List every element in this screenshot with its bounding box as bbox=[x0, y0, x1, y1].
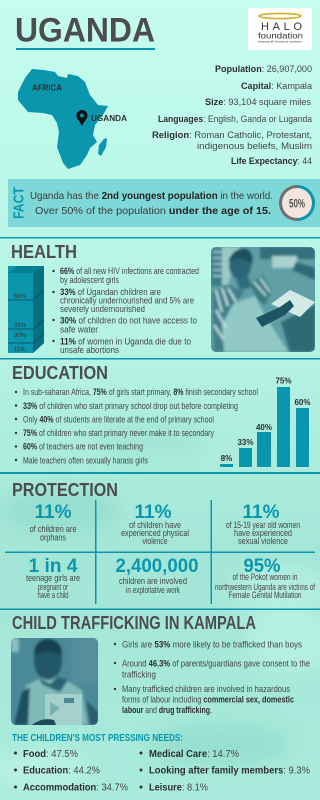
icon: map pin bbox=[76, 110, 88, 126]
chart: 50% donut: 50% bbox=[289, 196, 305, 210]
heading: fact: FACT bbox=[10, 187, 28, 219]
stat: exploitative work: in exploitative work bbox=[126, 585, 180, 595]
health bullets: 33% of Ugandan children are bbox=[60, 287, 161, 297]
trafficking bullets bbox=[114, 640, 310, 715]
stat: sexual violence: 11% bbox=[242, 502, 280, 523]
needs list: Leisure: 8.1% bbox=[149, 782, 208, 794]
logo: Halo Foundation: helping all Kenema orphans bbox=[258, 40, 303, 44]
country facts: Languages: English, Ganda or Luganda bbox=[158, 114, 313, 125]
logo: Halo Foundation: foundation bbox=[258, 30, 303, 40]
stat: teenage pregnancy: teenage girls are bbox=[26, 573, 80, 583]
health bullets: unsafe abortions bbox=[60, 345, 119, 355]
trafficking bullets: Girls are 53% more likely to be trafficked than boys bbox=[122, 640, 302, 650]
label: Africa: AFRICA bbox=[32, 82, 62, 92]
education bullets: Male teachers often sexually harass girls bbox=[23, 456, 148, 466]
chart: 3D stacked bar: 11% bbox=[14, 347, 26, 353]
panel: fact bbox=[8, 179, 320, 227]
fact text: Uganda has the 2nd youngest population in the world. bbox=[30, 190, 273, 202]
stat: orphans: orphans bbox=[40, 532, 66, 542]
stat: exploitative work: 2,400,000 bbox=[116, 556, 198, 577]
heading: child trafficking: CHILD TRAFFICKING IN KAMPALA bbox=[12, 613, 256, 633]
education bullets: Only 40% of students are literate at the end of primary school bbox=[23, 414, 214, 424]
country facts: Size: 93,104 square miles bbox=[205, 97, 311, 108]
needs list: Education: 44.2% bbox=[23, 766, 100, 776]
needs list: Looking after family members: 9.3% bbox=[149, 766, 310, 776]
trafficking bullets: Many trafficked children are involved in hazardous bbox=[122, 684, 290, 694]
stat: exploitative work bbox=[116, 556, 198, 595]
fact text: Over 50% of the population under the age of 15. bbox=[35, 205, 271, 217]
country facts: Life Expectancy: 44 bbox=[231, 156, 312, 167]
stat: teenage pregnancy: pregnant or bbox=[38, 582, 68, 592]
health bullets: by adolescent girls bbox=[60, 275, 119, 285]
stat: sexual violence bbox=[226, 502, 300, 546]
panel: child trafficking bbox=[11, 613, 310, 794]
stat: physical violence: of children have bbox=[129, 520, 181, 530]
stat: physical violence bbox=[121, 502, 189, 546]
needs list: Medical Care: 14.7% bbox=[149, 749, 239, 760]
map: Africa bbox=[18, 69, 127, 169]
chart: 50% donut bbox=[279, 185, 315, 221]
education bullets: 33% of children who start primary school drop out before completing bbox=[23, 401, 238, 411]
logo: Halo Foundation bbox=[248, 8, 312, 50]
stat: orphans: 11% bbox=[34, 502, 72, 523]
stat: teenage pregnancy: have a child bbox=[38, 590, 68, 600]
label: Uganda: UGANDA bbox=[91, 113, 127, 123]
needs list: Accommodation: 34.7% bbox=[23, 782, 128, 794]
health bullets: 30% of children do not have access to bbox=[60, 316, 197, 326]
health bullets bbox=[52, 266, 199, 355]
photo: child drawing bbox=[211, 247, 315, 352]
chart: 3D stacked bar: 66% bbox=[14, 294, 27, 300]
bar chart: education: 75% bbox=[275, 376, 292, 386]
stat: female genital mutilation bbox=[215, 556, 315, 600]
stat: physical violence: experienced physical bbox=[121, 528, 189, 538]
stat: sexual violence: sexual violence bbox=[238, 536, 288, 546]
stat: orphans bbox=[30, 502, 76, 542]
education bullets: 60% of teachers are not even teaching bbox=[23, 442, 143, 452]
country facts: Religion: Roman Catholic, Protestant, bbox=[152, 130, 312, 141]
health bullets: severely undernourished bbox=[60, 304, 145, 314]
needs list: Food: 47.5% bbox=[23, 749, 78, 760]
needs list bbox=[14, 749, 310, 794]
heading: health: HEALTH bbox=[11, 242, 77, 262]
title: UGANDA bbox=[15, 12, 155, 50]
chart: 3D stacked bar: 30% bbox=[14, 333, 27, 339]
bar chart: education: 60% bbox=[294, 398, 311, 407]
heading: most pressing needs: THE CHILDREN'S MOST PRESSING NEEDS: bbox=[12, 733, 183, 744]
health bullets: chronically undernourished and 5% are bbox=[60, 296, 194, 306]
bar chart: education: 8% bbox=[221, 454, 232, 463]
stat: exploitative work: children are involved bbox=[119, 576, 187, 586]
stat: teenage pregnancy: 1 in 4 bbox=[28, 556, 78, 577]
panel: protection bbox=[5, 480, 315, 604]
stat: physical violence: violence bbox=[142, 536, 168, 546]
country facts: indigenous beliefs, Muslim bbox=[197, 141, 312, 152]
panel: health bbox=[8, 242, 315, 355]
heading: education: EDUCATION bbox=[12, 363, 108, 383]
trafficking bullets: forms of labour including commercial sex, domestic bbox=[122, 694, 294, 704]
heading: protection: PROTECTION bbox=[12, 480, 118, 500]
bar chart: education bbox=[220, 376, 311, 467]
trafficking bullets: labour and drug trafficking. bbox=[122, 705, 212, 715]
country facts: Capital: Kampala bbox=[241, 81, 313, 92]
chart: 3D stacked bar bbox=[8, 266, 44, 353]
education bullets: In sub-saharan Africa, 75% of girls start primary, 8% finish secondary school bbox=[23, 387, 258, 397]
health bullets: safe water bbox=[60, 324, 98, 334]
fact text bbox=[30, 190, 273, 217]
photo: boy with paper bbox=[11, 638, 98, 725]
bar chart: education: 40% bbox=[256, 423, 272, 432]
panel: education bbox=[12, 363, 311, 467]
stat: sexual violence: have experienced bbox=[234, 528, 292, 538]
education bullets bbox=[15, 387, 258, 466]
health bullets: 66% of all new HIV infections are contracted bbox=[60, 266, 199, 276]
stat: female genital mutilation: 95% bbox=[244, 556, 281, 577]
logo: Halo Foundation: HALO bbox=[261, 21, 302, 33]
country facts: Population: 26,907,000 bbox=[215, 64, 312, 75]
bar chart: education: 33% bbox=[237, 438, 254, 447]
health bullets: 11% of women in Uganda die due to bbox=[60, 336, 191, 346]
chart: 3D stacked bar: 33% bbox=[14, 323, 27, 329]
stat: teenage pregnancy bbox=[26, 556, 80, 600]
stat: physical violence: 11% bbox=[134, 502, 172, 523]
education bullets: 75% of children who start primary never make it to secondary bbox=[23, 428, 214, 438]
stat: orphans: of children are bbox=[30, 524, 76, 534]
country facts bbox=[152, 64, 313, 167]
trafficking bullets: trafficking bbox=[122, 670, 156, 680]
